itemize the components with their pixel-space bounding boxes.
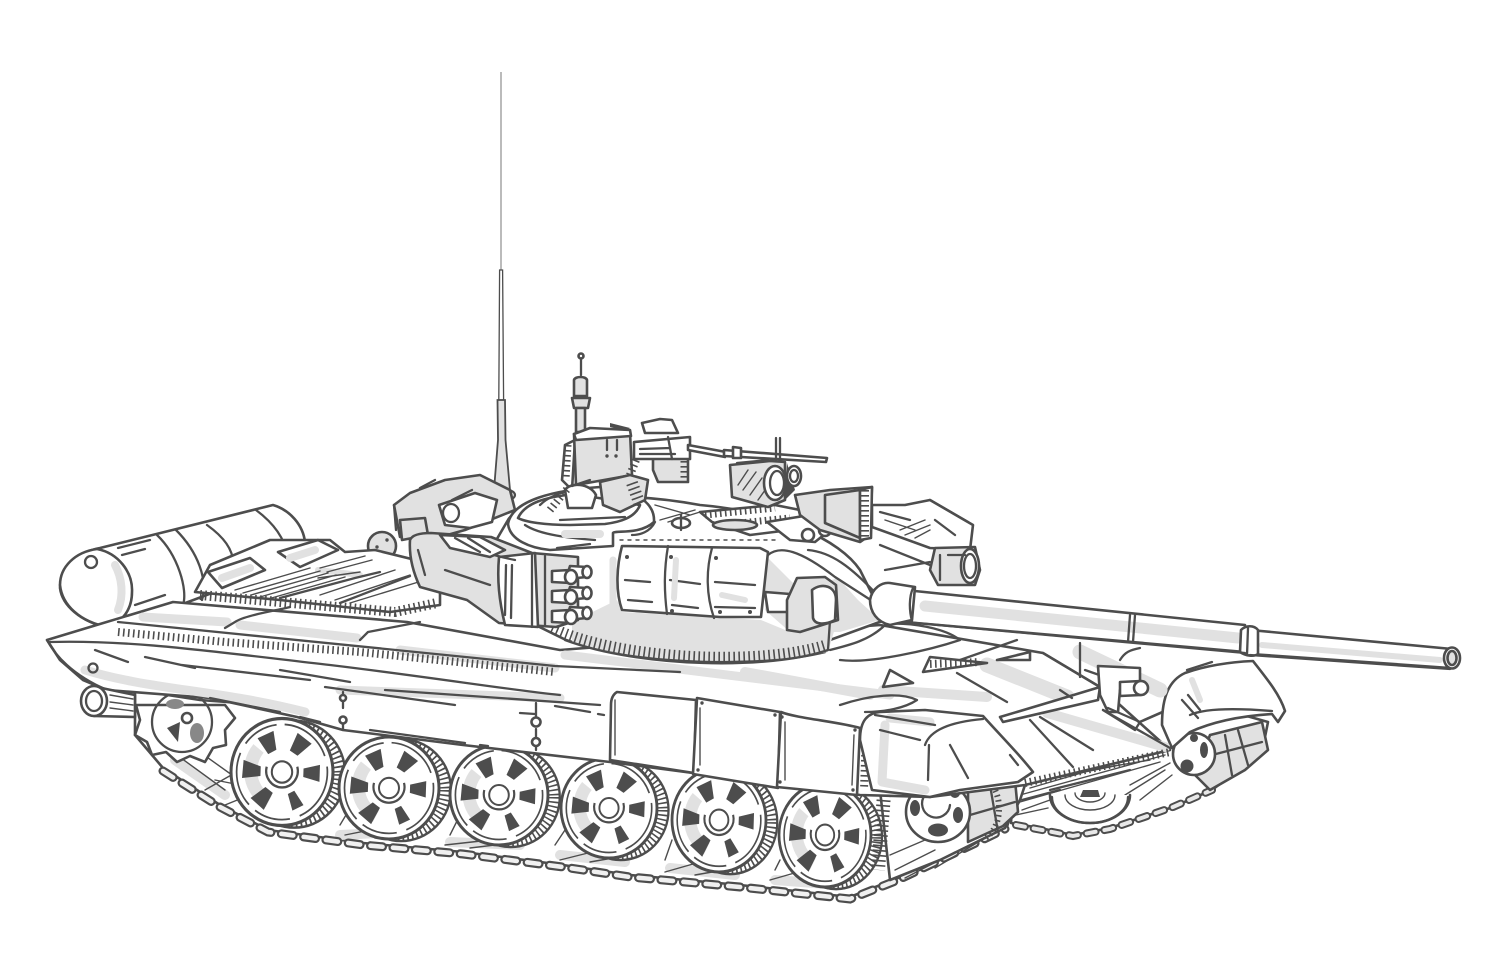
- white tube beside vision device: [765, 592, 790, 612]
- vision device: [787, 577, 838, 632]
- rear right stowage frame: [872, 500, 973, 570]
- ERA block: [617, 546, 768, 617]
- main gun: [870, 583, 1460, 669]
- near track and sprocket: [135, 690, 1020, 899]
- front fender: [860, 710, 1033, 797]
- hatch on dome: [655, 505, 700, 522]
- glacis details: [1000, 687, 1100, 722]
- turret rear stowage: [368, 475, 515, 560]
- rear tow cylinder: [81, 686, 135, 717]
- antenna: [489, 72, 515, 501]
- tow hook bracket: [1098, 648, 1148, 730]
- dome shading: [572, 600, 835, 661]
- hull: [47, 602, 1170, 797]
- hull shading: [85, 617, 1165, 747]
- turret roof deck: [700, 505, 810, 535]
- smoke grenade launchers: [552, 566, 592, 624]
- cupola: [508, 487, 654, 550]
- turret dome: [470, 496, 885, 662]
- idler wheel and front track: [878, 770, 1030, 880]
- commander machine gun and periscope: [550, 354, 827, 512]
- right turret box: [930, 547, 980, 585]
- far fender: [1162, 661, 1285, 748]
- turret: [410, 487, 885, 663]
- sprocket: [135, 692, 235, 762]
- rear deck: [195, 540, 440, 612]
- left housing: [410, 533, 578, 627]
- gunner sight: [730, 460, 801, 507]
- road wheels: [231, 718, 882, 889]
- far side running gear: [1011, 700, 1268, 836]
- side strip hatching: [118, 632, 555, 672]
- external fuel drum: [60, 505, 305, 628]
- side armour panels: [610, 692, 866, 795]
- infrared searchlight box: [795, 487, 872, 542]
- hull plate lines: [47, 607, 680, 746]
